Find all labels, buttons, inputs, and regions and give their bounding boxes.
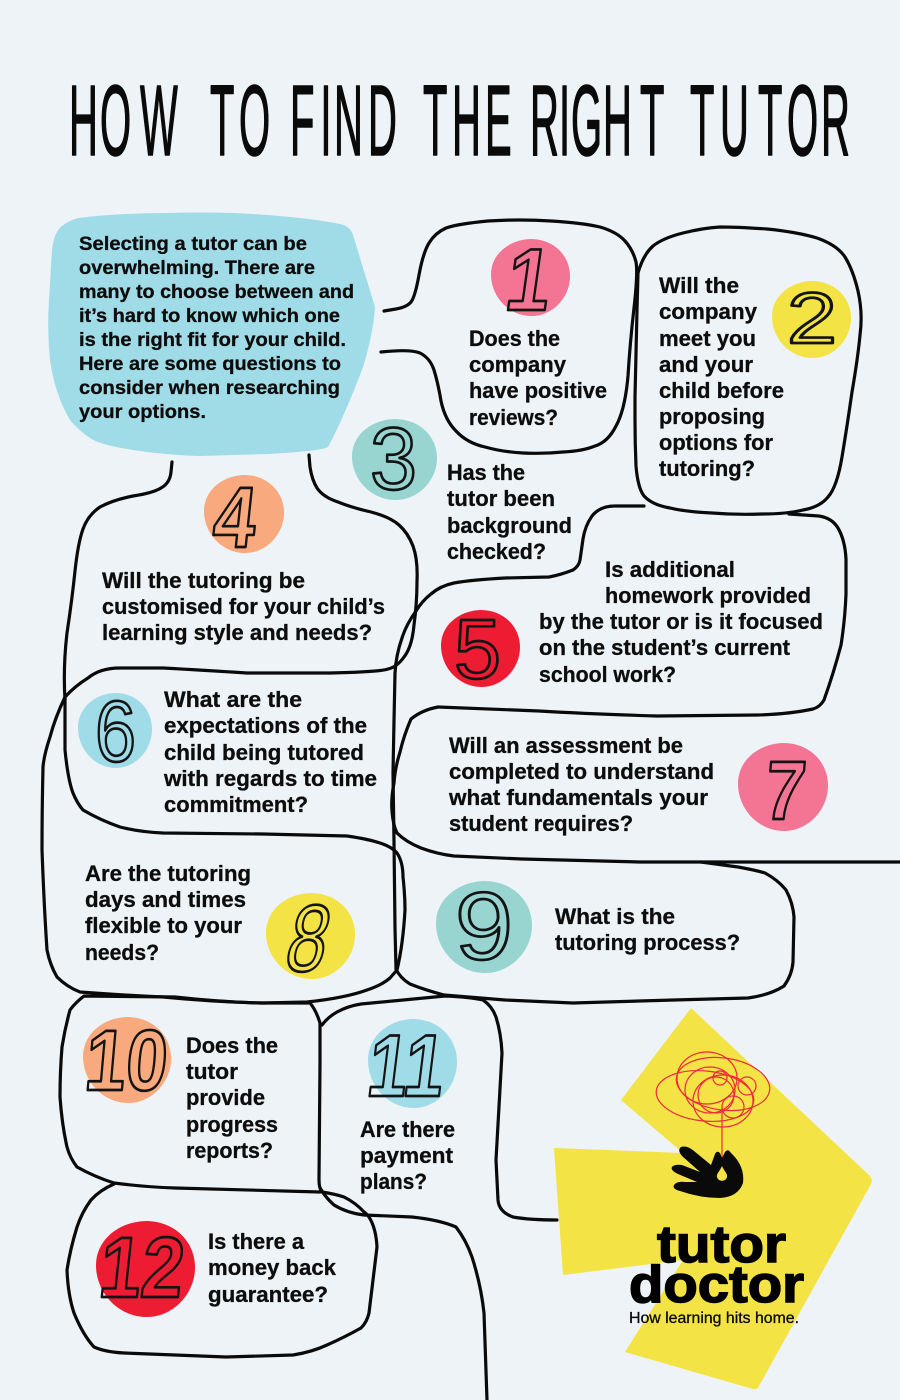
question 5 text: homework provided [605, 583, 811, 608]
question 7 text: what fundamentals your [448, 785, 708, 810]
question 3 text: tutor been [447, 486, 555, 511]
question 4 text: customised for your child’s [102, 594, 385, 619]
question 2 text: options for [659, 430, 773, 455]
number badge 6: 6 [95, 684, 136, 780]
question 9 text: tutoring process? [555, 930, 740, 955]
panel: question 6 [65, 668, 405, 970]
panel: question 12 [67, 1184, 377, 1357]
intro blue shape [48, 212, 375, 456]
question 5 text: on the student’s current [539, 635, 791, 660]
question 8 text: needs? [85, 940, 159, 965]
logo wordmark [629, 1216, 804, 1314]
question 12 text: Is there a [208, 1229, 305, 1254]
number badge 12: 12 [95, 1220, 189, 1316]
bubble outline 10 [60, 996, 364, 1212]
question 10 text: reports? [186, 1138, 273, 1163]
logo tagline: How learning hits home. [629, 1310, 799, 1327]
question 12 text [208, 1229, 337, 1307]
bubble outline 12 [67, 1184, 377, 1357]
question 7 text: Will an assessment be [449, 733, 683, 758]
title: HOW TO FIND THE RIGHT TUTOR [69, 66, 850, 177]
number badge 5: 5 [454, 602, 501, 696]
bubble outline 1 [381, 220, 637, 453]
logo: tutor doctor [554, 1008, 872, 1389]
question 2 text [659, 273, 784, 481]
question 7 text [448, 733, 714, 836]
question 11 text [360, 1117, 455, 1194]
question 5 text: Is additional [605, 557, 735, 582]
panel: question 2 [635, 227, 861, 514]
question 1 text: Does the [469, 326, 560, 351]
question 11 text: Are there [360, 1117, 455, 1142]
panel: question 9 [396, 862, 794, 1003]
intro text [79, 233, 354, 423]
number badge 11: 11 [363, 1016, 451, 1115]
question 6 text: child being tutored [164, 740, 364, 765]
panel: question 7 [392, 707, 900, 862]
question 2 text: and your [659, 352, 753, 377]
number badge 9 [436, 873, 532, 980]
question 2 text: meet you [659, 326, 756, 351]
question 2 text: proposing [659, 404, 765, 429]
question 11 text: plans? [360, 1169, 427, 1194]
intro text: it’s hard to know which one [79, 305, 340, 327]
panel: question 10 [60, 996, 364, 1212]
question 6 text: with regards to time [163, 766, 377, 791]
bubble outline 6 [65, 668, 405, 970]
number badge 1: 1 [500, 230, 558, 329]
question 8 text: days and times [85, 887, 246, 912]
question 5 text [539, 557, 823, 687]
number badge 8: 8 [278, 886, 340, 992]
bubble outline 4 [64, 455, 417, 700]
icon: hand [672, 1146, 743, 1198]
question 3 text: Has the [447, 460, 525, 485]
intro text: overwhelming. There are [79, 257, 315, 279]
question 9 text [555, 904, 740, 955]
bubble outline 11 [320, 996, 557, 1400]
intro text: Here are some questions to [79, 353, 341, 375]
number badge 6 [78, 684, 152, 780]
question 6 text [163, 687, 377, 817]
bubble outline 5 [393, 506, 846, 969]
question 1 text [469, 326, 607, 430]
intro text: your options. [79, 401, 206, 423]
question 2 text: Will the [659, 273, 739, 298]
number badge 5 [441, 602, 520, 696]
question 12 text: guarantee? [208, 1282, 328, 1307]
question 1 text: have positive [469, 378, 607, 403]
question 9 text: What is the [555, 904, 675, 929]
question 2 text: child before [659, 378, 784, 403]
question 8 text [85, 861, 251, 965]
panel: introduction [48, 212, 375, 456]
question 6 text: What are the [164, 687, 302, 712]
question 10 text [186, 1033, 278, 1163]
number badge 9: 9 [455, 873, 513, 980]
question 5 text: by the tutor or is it focused [539, 609, 823, 634]
question 10 text: provide [186, 1085, 265, 1110]
number badge 10: 10 [81, 1013, 172, 1109]
logo wordmark: doctor [629, 1256, 804, 1314]
question 4 text: learning style and needs? [102, 620, 372, 645]
question 8 text: Are the tutoring [85, 861, 251, 886]
panel: question 8 [42, 697, 397, 1003]
panel: question 3 [352, 409, 572, 564]
question 2 text: company [659, 299, 758, 324]
question 10 text: tutor [186, 1059, 238, 1084]
question 7 text: completed to understand [449, 759, 714, 784]
number badge 4: 4 [209, 470, 261, 566]
question 3 text: checked? [447, 539, 546, 564]
question 6 text: expectations of the [164, 713, 367, 738]
question 8 text: flexible to your [85, 913, 242, 938]
icon: red scribble [654, 1052, 773, 1160]
intro text: consider when researching [79, 377, 340, 399]
question 1 text: reviews? [469, 405, 558, 430]
question 3 text: background [447, 513, 572, 538]
question 10 text: Does the [186, 1033, 278, 1058]
bubble outline 7 [392, 707, 900, 862]
question 12 text: money back [208, 1255, 337, 1280]
intro text: Selecting a tutor can be [79, 233, 307, 255]
question 4 text [102, 568, 385, 645]
question 10 text: progress [186, 1112, 278, 1137]
panel: question 4 [64, 455, 417, 700]
question 7 text: student requires? [449, 811, 633, 836]
number badge 3: 3 [370, 409, 417, 508]
number badge 3 [352, 409, 437, 508]
bubble outline 8 [42, 697, 397, 1003]
question 4 text: Will the tutoring be [102, 568, 305, 593]
number badge 2: 2 [787, 279, 837, 359]
yellow logo background shape [554, 1008, 872, 1389]
number badge 7: 7 [761, 744, 810, 837]
logo wordmark: tutor [657, 1216, 786, 1274]
bubble outline 9 [396, 862, 794, 1003]
intro text: is the right fit for your child. [79, 329, 346, 351]
intro text: many to choose between and [79, 281, 354, 303]
question 1 text: company [469, 352, 567, 377]
panel: question 5 [393, 506, 846, 969]
number badge 2 [772, 279, 851, 359]
question 6 text: commitment? [164, 792, 308, 817]
panel: question 1 [381, 220, 637, 453]
panel: question 11 [320, 996, 557, 1400]
bubble outline 2 [635, 227, 861, 514]
question 5 text: school work? [539, 662, 676, 687]
question 11 text: payment [360, 1143, 454, 1168]
question 3 text [447, 460, 572, 564]
number badge 7 [738, 743, 828, 837]
question 2 text: tutoring? [659, 456, 755, 481]
